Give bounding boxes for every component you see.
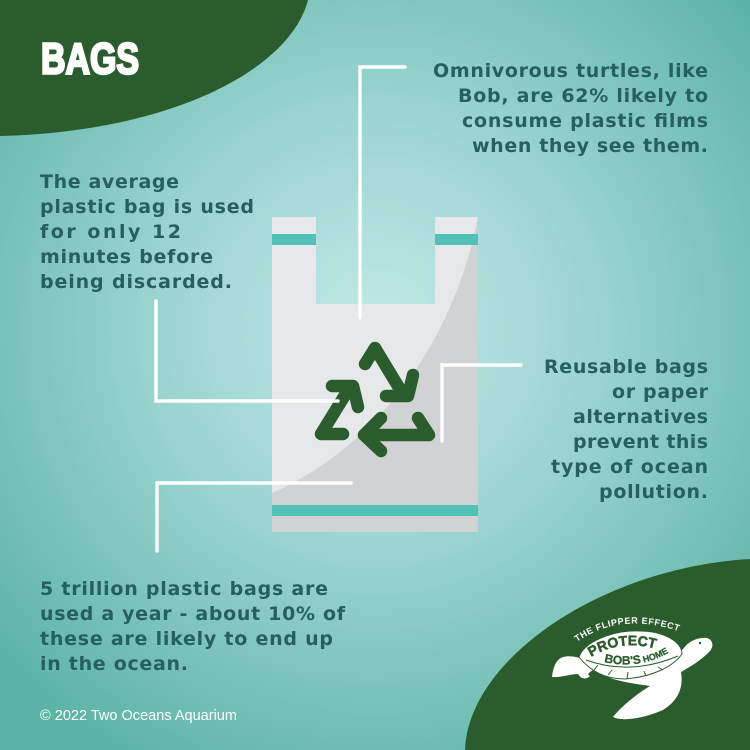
text: average plastic bag: The average [40,171,179,193]
corner shape: top left [0,0,308,136]
text: reusable bags [544,356,709,503]
text: reusable bags: Reusable bags [544,356,708,378]
text: 5 trillion plastic bags: these are likely to end up [40,628,333,650]
text: reusable bags: alternatives [573,406,708,428]
turtle shell [579,631,682,679]
text: 5 trillion plastic bags: in the ocean. [40,653,188,675]
text: reusable bags: type of ocean [551,456,708,478]
turtle body, front flipper and head [592,638,712,719]
logo text: bob's home: BOB'S HOME [604,647,669,665]
text: average plastic bag: plastic bag is used [40,196,254,218]
turtle rear flippers [552,656,596,678]
connector lines [156,67,521,551]
title: BAGS [41,34,139,84]
text: 5 trillion plastic bags: used a year - about 10% of [40,603,346,625]
copyright: © 2022 Two Oceans Aquarium [40,708,237,724]
turtle shell scutes [586,656,678,679]
icon: plastic bag [272,217,478,532]
text: reusable bags: or paper [612,381,709,403]
icon: recycling symbol [321,348,429,451]
text: average plastic bag: being discarded. [40,271,232,293]
text: 5 trillion plastic bags: 5 trillion plastic bags are [40,578,328,600]
text: omnivorous turtles: Bob, are 62% likely to [458,85,708,107]
text: average plastic bag [40,171,254,293]
text: average plastic bag: for only 12 [40,221,181,243]
text: omnivorous turtles: consume plastic films [462,110,708,132]
text: reusable bags: prevent this [573,431,708,453]
corner shape: bottom right [465,559,750,750]
logo text: protect: PROTECT [587,635,658,657]
text: 5 trillion plastic bags [40,578,346,675]
text: omnivorous turtles: when they see them. [472,135,708,157]
text: reusable bags: pollution. [599,481,708,503]
text: omnivorous turtles: Omnivorous turtles, like [433,60,708,82]
text: average plastic bag: minutes before [40,246,213,268]
turtle eye [699,642,701,644]
logo: turtle [552,617,712,720]
logo text: the flipper effect: THE FLIPPER EFFECT [574,617,680,641]
text: omnivorous turtles [433,60,708,157]
